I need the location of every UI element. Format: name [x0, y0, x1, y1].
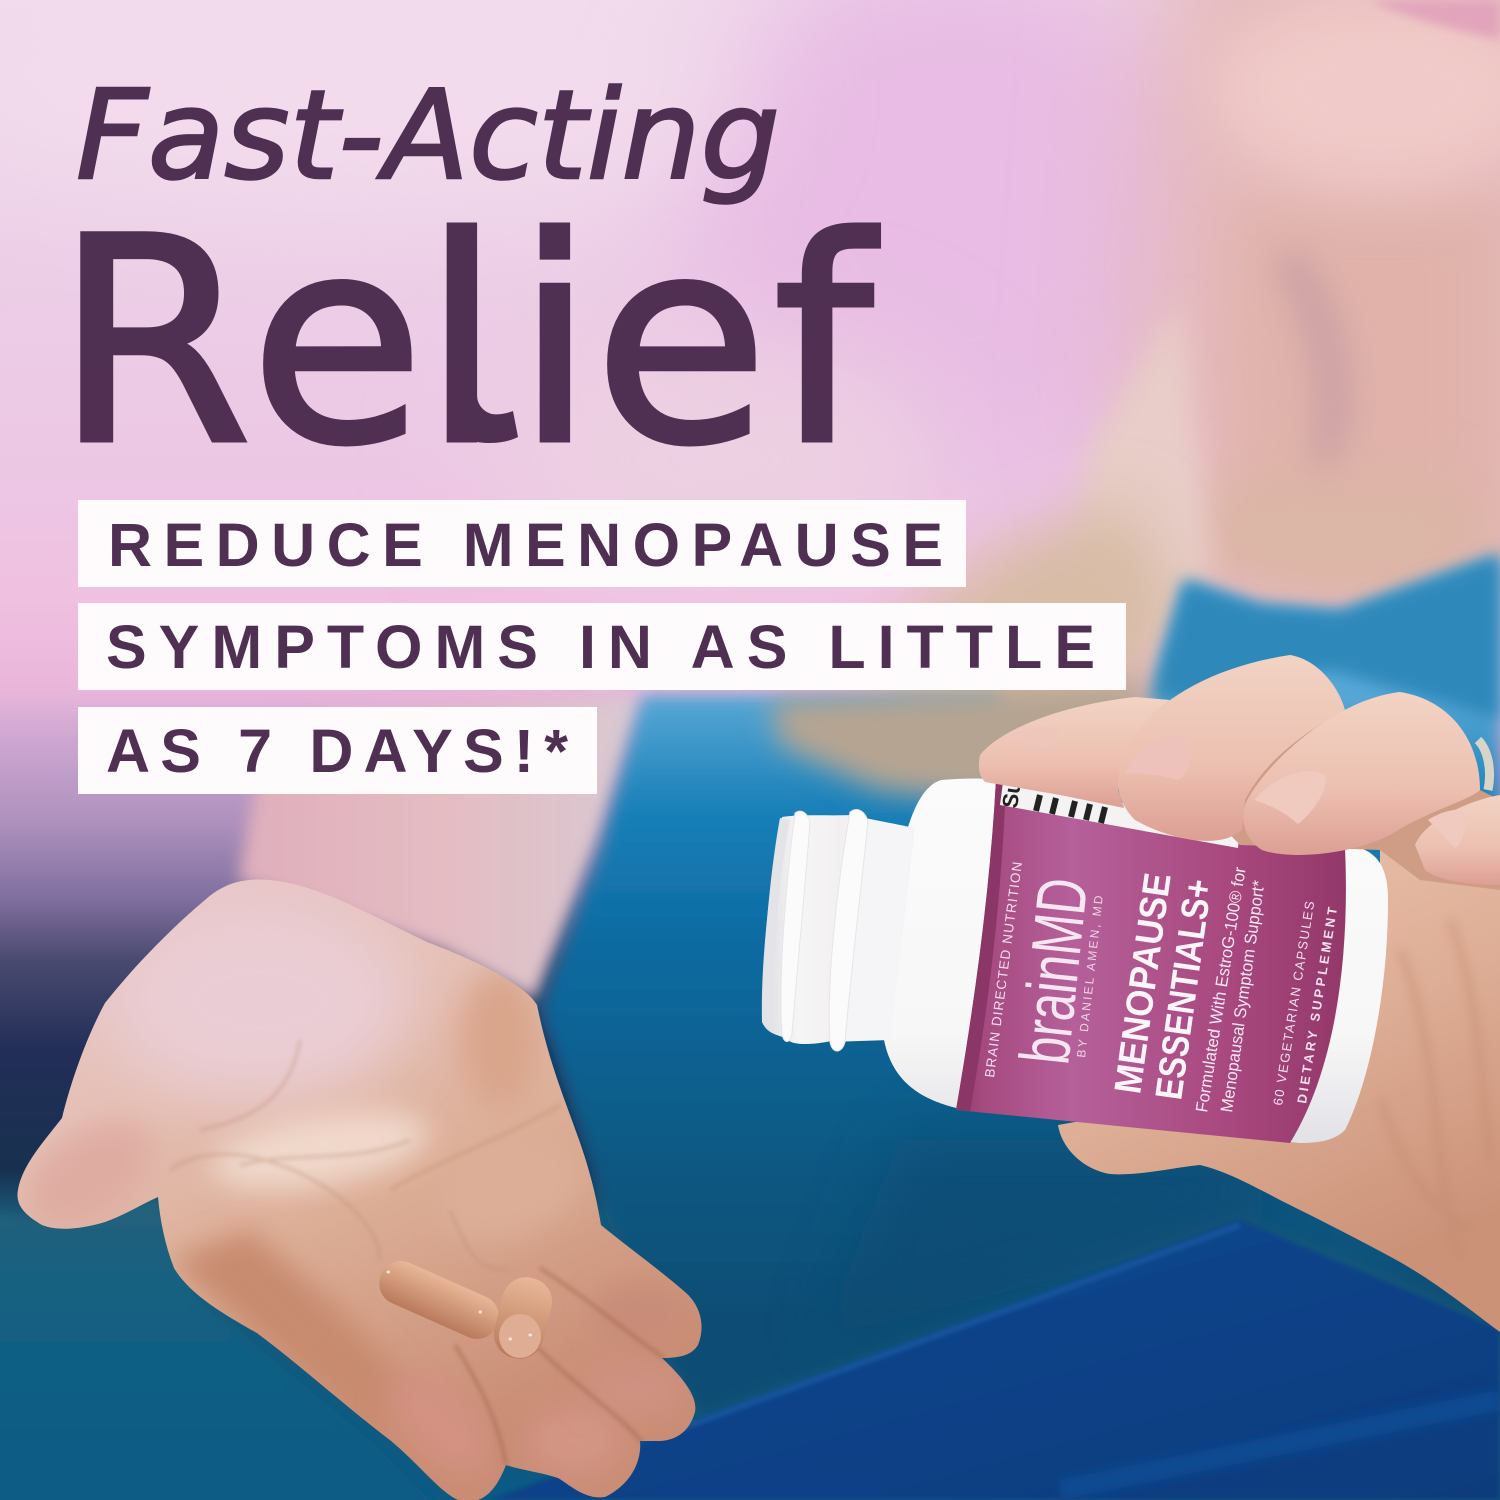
background: chin — [1210, 0, 1500, 190]
skin behind fingers — [1130, 700, 1500, 890]
label: product name line 1: MENOPAUSE — [1107, 871, 1180, 1096]
left hand — [9, 880, 702, 1500]
background: neck base colour — [1230, 200, 1500, 600]
palm: centre highlight — [206, 1096, 434, 1204]
subheading line 1: REDUCE MENOPAUSE — [108, 511, 943, 579]
right hand — [1058, 840, 1500, 1332]
fingertip pink — [390, 1385, 486, 1474]
ring — [1478, 740, 1490, 790]
finger gaps — [455, 1268, 664, 1465]
finger 4 — [1415, 795, 1500, 885]
label: supplement facts strip — [1000, 782, 1240, 848]
nail 1 — [992, 727, 1060, 747]
capsule 2 — [489, 1272, 557, 1364]
shirt — [540, 555, 1500, 1420]
bottle: lip — [762, 815, 852, 1044]
bottle: neck — [830, 815, 915, 1042]
label: capsule count: 60 VEGETARIAN CAPSULES — [1270, 899, 1318, 1106]
right hand fingers — [979, 655, 1500, 890]
background: forearm — [238, 695, 642, 1000]
subheading line 3 — [78, 707, 597, 794]
fingertip — [525, 1404, 625, 1476]
label: formula line 2: Menopausal Symptom Support* — [1217, 879, 1269, 1114]
label: logo: brainMD — [1005, 874, 1102, 1068]
capsule 1 — [372, 1254, 506, 1346]
index finger warmth — [170, 1230, 470, 1500]
shirt: dark fold — [820, 1140, 1280, 1340]
hand tendons — [1380, 920, 1490, 1260]
bottle — [762, 765, 1388, 1143]
finger 2 — [1117, 655, 1345, 841]
seat cushion left — [0, 1195, 450, 1500]
headline: tail of letter l — [448, 395, 518, 443]
label: brand tag line: BRAIN DIRECTED NUTRITION — [982, 859, 1025, 1078]
label: facts lines — [1036, 795, 1105, 823]
nail 3 — [1254, 771, 1326, 824]
capsules — [372, 1254, 557, 1364]
bottle: base — [884, 778, 1388, 1143]
palm: thenar tan — [460, 970, 540, 1110]
trousers: seam highlight — [660, 1225, 1240, 1436]
label: product name line 2: ESSENTIALS+ — [1148, 877, 1221, 1102]
trousers: fold — [1060, 1400, 1500, 1490]
finger 1 — [979, 697, 1170, 808]
bottle: thread ring 1 — [781, 811, 810, 1042]
headline: Relief: Relief — [55, 177, 880, 507]
fingertip — [618, 1283, 692, 1312]
subheading line 2: SYMPTOMS IN AS LITTLE — [106, 613, 1095, 681]
shirt: collar light — [1150, 555, 1500, 720]
palm creases — [170, 1040, 556, 1208]
bottle: thread ring 2 — [829, 810, 868, 1051]
palm: upper light area — [110, 900, 410, 1100]
nail 2 — [1125, 736, 1191, 780]
headline: Fast-Acting: Fast-Acting — [76, 65, 780, 208]
capsule highlights — [388, 1272, 530, 1339]
trousers — [490, 1220, 1500, 1500]
background: face and neck — [1130, 0, 1500, 620]
background: neck shadow — [1270, 250, 1354, 480]
background: lips — [1370, 0, 1500, 40]
label: formula line 1: Formulated With EstroG-100® for — [1192, 865, 1250, 1114]
label: facts text: Sup — [997, 765, 1028, 810]
palm mount — [465, 1146, 592, 1234]
back of hand — [1058, 840, 1500, 1332]
background: blonde hair — [880, 500, 1180, 780]
background: lower neck — [1160, 475, 1500, 595]
shirt: hair over shoulder — [770, 680, 1150, 800]
fingertip — [585, 1360, 685, 1420]
finger 3 — [1243, 692, 1480, 855]
bottle: mouth interior — [762, 818, 790, 1027]
background: lilac glow — [680, 0, 1240, 500]
background: pale hair strand — [1060, 300, 1210, 660]
label: author line: BY DANIEL AMEN, MD — [1074, 893, 1106, 1058]
bottle: label — [956, 765, 1346, 1143]
nail 4 — [1428, 809, 1466, 848]
background: pale pink upper left — [0, 0, 750, 200]
label: supplement type: DIETARY SUPPLEMENT — [1294, 905, 1340, 1104]
capsule 2 cap — [499, 1314, 541, 1358]
thumb pink — [18, 1122, 148, 1229]
subheading line 3: AS 7 DAYS!* — [106, 717, 568, 785]
label: left band — [956, 780, 1006, 1111]
background: pale pink behind headline — [490, 340, 950, 580]
